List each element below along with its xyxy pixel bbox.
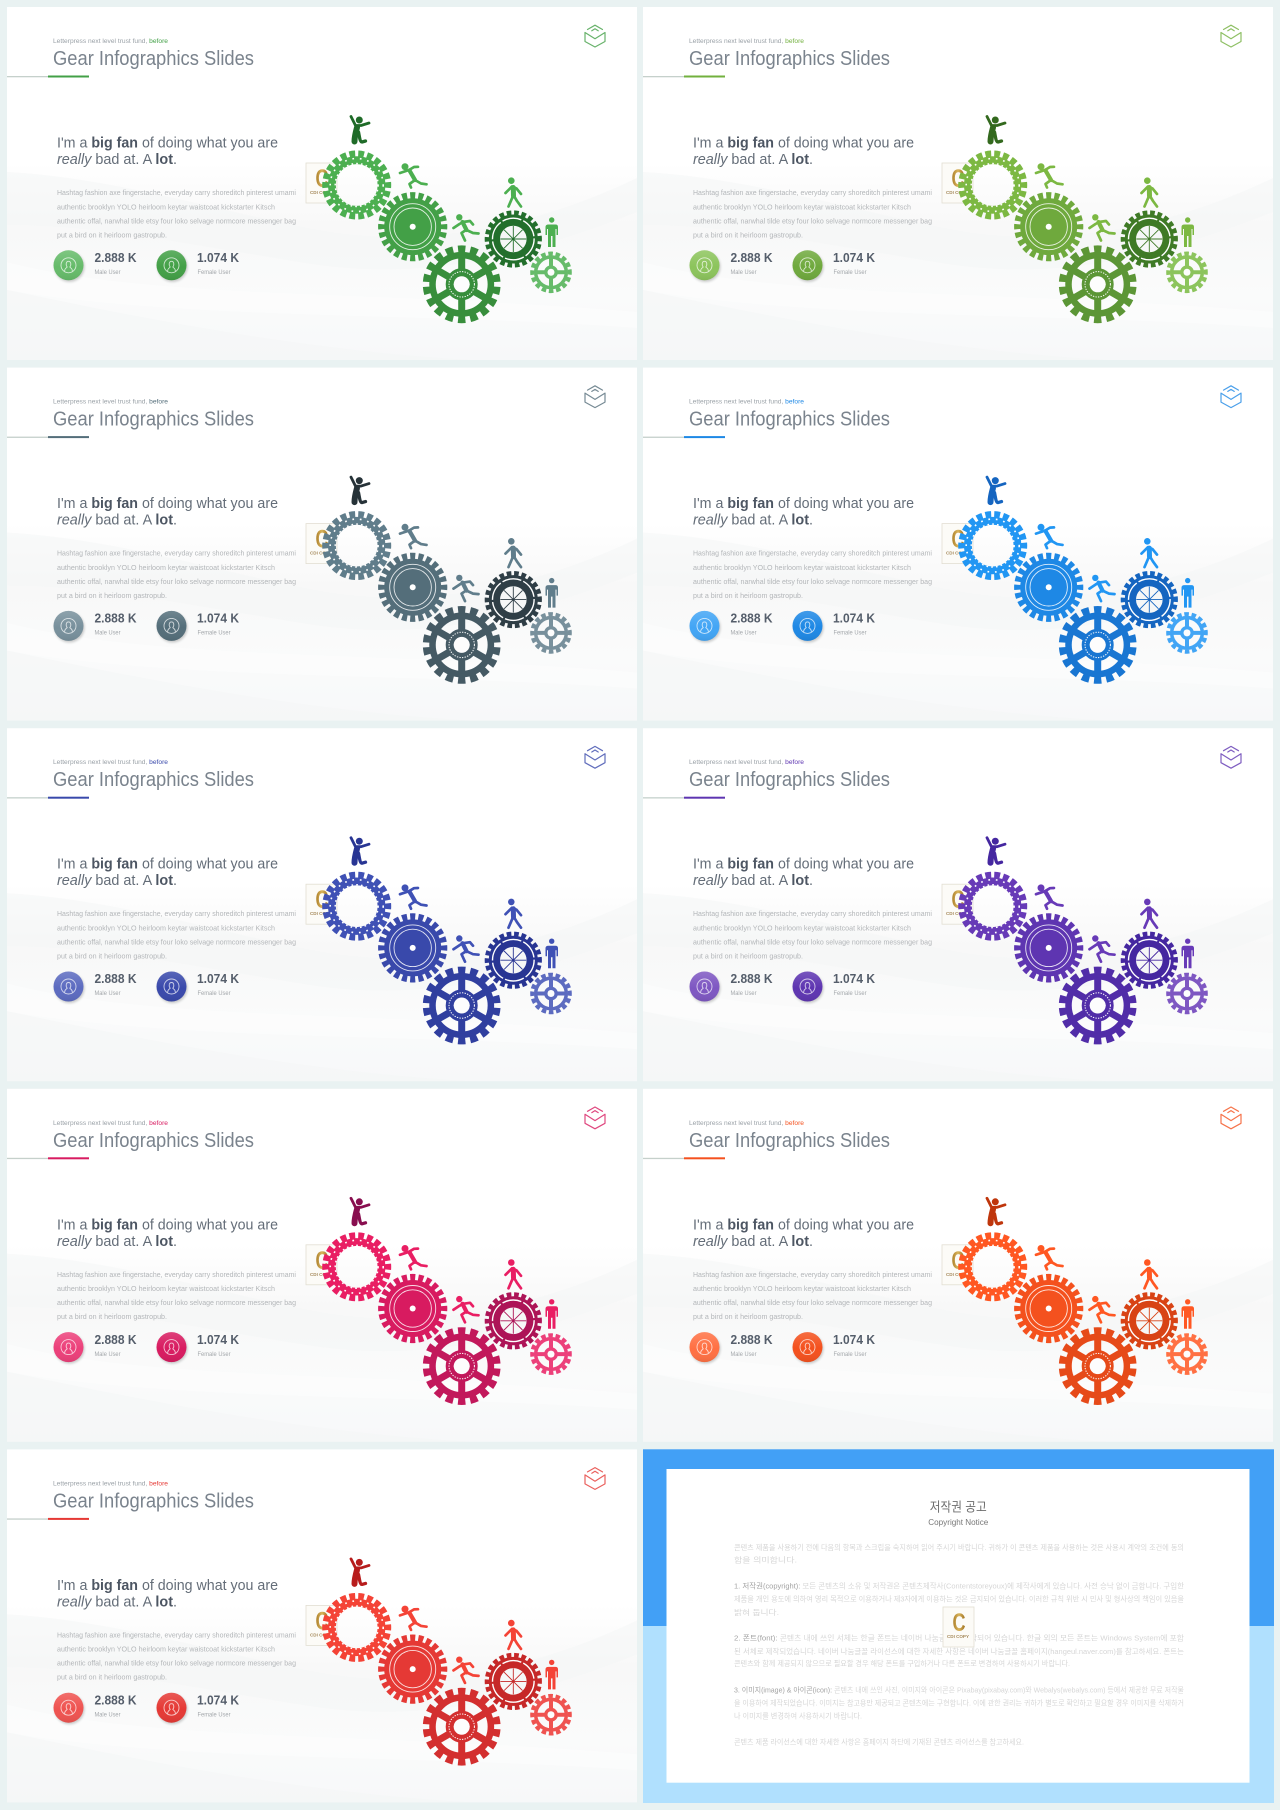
slide heading: Gear Infographics Slides bbox=[53, 1490, 254, 1512]
icon: cube bbox=[1221, 386, 1241, 408]
slide background bbox=[643, 368, 1273, 721]
notice intro bbox=[734, 1542, 1184, 1565]
body paragraph: put a bird on it heirloom gastropub. bbox=[693, 593, 803, 600]
body paragraph: authentic brooklyn YOLO heirloom keytar waistcoat kickstarter Kitsch bbox=[57, 204, 275, 211]
stat: male user: 2.888 K bbox=[730, 611, 773, 626]
headline second line: really bad at. A lot. bbox=[57, 151, 177, 168]
notice section 1: 1. 저작권(copyright): 모든 콘텐츠의 소유 및 저작권은 콘텐츠제작사(Contentstoreyoux)에 제작사에게 있습니다. 사전 승낙 없이 금합니다. 구입한 bbox=[734, 1581, 1184, 1591]
headline second line: really bad at. A lot. bbox=[57, 1593, 177, 1610]
heading underline bbox=[7, 1518, 89, 1520]
watermark logo bbox=[942, 884, 973, 924]
body paragraph: authentic brooklyn YOLO heirloom keytar waistcoat kickstarter Kitsch bbox=[693, 1286, 911, 1293]
stat: male user: Male User bbox=[730, 991, 756, 997]
stat: female user: 1.074 K bbox=[197, 1332, 240, 1347]
notice section 2: 2. 폰트(font): 콘텐츠 내에 쓰인 서체는 한글 폰트는 네이버 나눔글꼴이 제작되어 있습니다. 한글 외의 모든 폰트는 Windows System에 포함 bbox=[734, 1633, 1184, 1643]
headline second line: really bad at. A lot. bbox=[57, 1233, 177, 1250]
stat: female user bbox=[792, 1332, 876, 1364]
gear illustration with people bbox=[326, 1198, 570, 1401]
body paragraph: Hashtag fashion axe fingerstache, everyday carry shoreditch pinterest umami bbox=[693, 1272, 932, 1279]
headline second line: really bad at. A lot. bbox=[693, 872, 813, 889]
headline: I'm a big fan of doing what you are bbox=[693, 495, 914, 512]
watermark logo bbox=[942, 524, 973, 564]
heading underline bbox=[643, 797, 725, 799]
slide 7: pink bbox=[7, 1089, 637, 1442]
body paragraph: authentic brooklyn YOLO heirloom keytar waistcoat kickstarter Kitsch bbox=[693, 204, 911, 211]
body paragraph: authentic brooklyn YOLO heirloom keytar waistcoat kickstarter Kitsch bbox=[57, 926, 275, 933]
body paragraph bbox=[57, 190, 296, 239]
icon: cube bbox=[1221, 1107, 1241, 1129]
headline: I'm a big fan of doing what you are bbox=[693, 856, 914, 873]
body paragraph: put a bird on it heirloom gastropub. bbox=[693, 1314, 803, 1321]
slide background bbox=[7, 728, 637, 1081]
watermark logo bbox=[306, 163, 337, 203]
headline: I'm a big fan of doing what you are bbox=[57, 856, 278, 873]
watermark logo bbox=[942, 1245, 973, 1285]
heading underline bbox=[7, 76, 89, 78]
headline second line: really bad at. A lot. bbox=[693, 512, 813, 529]
stat: male user: 2.888 K bbox=[94, 971, 137, 986]
heading underline bbox=[7, 797, 89, 799]
header subtitle: Letterpress next level trust fund, before bbox=[53, 1120, 168, 1127]
heading underline bbox=[7, 1157, 89, 1159]
header subtitle: Letterpress next level trust fund, before bbox=[689, 1120, 804, 1127]
stat: male user: Male User bbox=[94, 991, 120, 997]
body paragraph: authentic brooklyn YOLO heirloom keytar waistcoat kickstarter Kitsch bbox=[57, 1647, 275, 1654]
body paragraph: put a bird on it heirloom gastropub. bbox=[57, 954, 167, 961]
white notice panel bbox=[666, 1469, 1250, 1783]
heading underline bbox=[643, 76, 725, 78]
body paragraph: authentic brooklyn YOLO heirloom keytar waistcoat kickstarter Kitsch bbox=[57, 1286, 275, 1293]
watermark logo bbox=[943, 1607, 974, 1647]
slide heading: Gear Infographics Slides bbox=[53, 1130, 254, 1152]
slide heading: Gear Infographics Slides bbox=[53, 48, 254, 70]
slide heading: Gear Infographics Slides bbox=[53, 409, 254, 431]
body paragraph: authentic offal, narwhal tilde etsy four loko selvage normcore messenger bag bbox=[57, 1661, 296, 1668]
headline second line: really bad at. A lot. bbox=[57, 512, 177, 529]
slide 2: lime bbox=[643, 7, 1273, 360]
notice section 1: 밝혀 둡니다. bbox=[734, 1607, 779, 1617]
notice intro: 함을 의미합니다. bbox=[734, 1555, 797, 1565]
header subtitle: Letterpress next level trust fund, before bbox=[53, 38, 168, 45]
watermark logo bbox=[306, 1245, 337, 1285]
stat: male user bbox=[690, 611, 773, 642]
notice subtitle: Copyright Notice bbox=[928, 1518, 989, 1527]
stat: male user bbox=[690, 971, 773, 1003]
icon: cube bbox=[585, 746, 605, 768]
slide heading: Gear Infographics Slides bbox=[689, 1130, 890, 1152]
body paragraph: Hashtag fashion axe fingerstache, everyday carry shoreditch pinterest umami bbox=[57, 551, 296, 558]
stat: female user: Female User bbox=[198, 991, 230, 997]
stat: male user: 2.888 K bbox=[94, 611, 137, 626]
stat: male user: Male User bbox=[94, 1712, 120, 1718]
stat: female user bbox=[156, 971, 240, 1003]
stat: female user bbox=[156, 1332, 240, 1364]
icon: cube bbox=[585, 1468, 605, 1489]
body paragraph: authentic offal, narwhal tilde etsy four loko selvage normcore messenger bag bbox=[693, 1300, 932, 1307]
watermark logo bbox=[306, 1605, 337, 1645]
notice section 3: 나 이미지를 변경하여 사용하시기 바랍니다. bbox=[734, 1710, 862, 1720]
headline second line: really bad at. A lot. bbox=[693, 151, 813, 168]
slide heading: Gear Infographics Slides bbox=[53, 769, 254, 791]
stat: female user: Female User bbox=[834, 1352, 866, 1358]
body paragraph: put a bird on it heirloom gastropub. bbox=[57, 232, 167, 239]
body paragraph: authentic brooklyn YOLO heirloom keytar waistcoat kickstarter Kitsch bbox=[693, 926, 911, 933]
headline second line: really bad at. A lot. bbox=[693, 1233, 813, 1250]
stat: male user: Male User bbox=[730, 631, 756, 637]
slide background bbox=[643, 728, 1273, 1081]
notice section 1: 제품을 개인 용도에 의하여 영리 목적으로 이용하거나 제3자에게 이용하는 것은 금지되어 있습니다. 이러한 규칙 위반 시 민사 및 형사상의 책임이 있음을 bbox=[734, 1593, 1184, 1603]
headline: I'm a big fan of doing what you are bbox=[693, 134, 914, 152]
stat: male user bbox=[54, 1332, 137, 1364]
gear illustration with people bbox=[962, 477, 1206, 680]
body paragraph: authentic offal, narwhal tilde etsy four loko selvage normcore messenger bag bbox=[693, 940, 932, 947]
header subtitle: Letterpress next level trust fund, before bbox=[53, 1480, 168, 1487]
heading underline bbox=[7, 436, 89, 438]
slide 8: orange bbox=[643, 1089, 1273, 1442]
body paragraph bbox=[57, 1632, 296, 1682]
stat: female user: 1.074 K bbox=[833, 1332, 876, 1347]
stat: male user: 2.888 K bbox=[94, 250, 137, 265]
stat: female user bbox=[792, 971, 876, 1003]
stat: female user: Female User bbox=[198, 270, 230, 276]
headline: I'm a big fan of doing what you are bbox=[693, 1216, 914, 1233]
gear illustration with people bbox=[962, 838, 1206, 1041]
body paragraph: authentic offal, narwhal tilde etsy four loko selvage normcore messenger bag bbox=[57, 579, 296, 586]
body paragraph: authentic brooklyn YOLO heirloom keytar waistcoat kickstarter Kitsch bbox=[693, 565, 911, 572]
body paragraph bbox=[693, 1272, 932, 1321]
stat: male user bbox=[54, 971, 137, 1003]
slide background bbox=[643, 1089, 1273, 1442]
stat: female user: 1.074 K bbox=[833, 611, 876, 626]
two-tone blue frame bbox=[643, 1449, 1274, 1803]
body paragraph: put a bird on it heirloom gastropub. bbox=[693, 232, 803, 239]
slide 3: slate bbox=[7, 368, 637, 721]
stat: female user: Female User bbox=[198, 1352, 230, 1358]
heading underline bbox=[643, 436, 725, 438]
icon: cube bbox=[585, 25, 605, 47]
gear illustration with people bbox=[326, 116, 570, 319]
notice section 3 bbox=[734, 1684, 1184, 1720]
body paragraph: authentic offal, narwhal tilde etsy four loko selvage normcore messenger bag bbox=[57, 218, 296, 225]
body paragraph: Hashtag fashion axe fingerstache, everyday carry shoreditch pinterest umami bbox=[693, 190, 932, 197]
stat: female user bbox=[792, 250, 876, 282]
icon: cube bbox=[1221, 746, 1241, 768]
notice title: 저작권 공고 bbox=[930, 1500, 987, 1515]
slide 5: indigo bbox=[7, 728, 637, 1081]
icon: cube bbox=[585, 1107, 605, 1129]
headline: I'm a big fan of doing what you are bbox=[57, 1577, 278, 1594]
stat: male user: Male User bbox=[730, 270, 756, 276]
stat: male user bbox=[690, 250, 773, 282]
heading underline bbox=[643, 1157, 725, 1159]
body paragraph: authentic offal, narwhal tilde etsy four loko selvage normcore messenger bag bbox=[693, 579, 932, 586]
watermark logo bbox=[306, 524, 337, 564]
watermark logo bbox=[942, 163, 973, 203]
body paragraph: authentic offal, narwhal tilde etsy four loko selvage normcore messenger bag bbox=[57, 940, 296, 947]
stat: female user bbox=[156, 1692, 240, 1724]
watermark logo bbox=[306, 884, 337, 924]
body paragraph bbox=[57, 911, 296, 960]
stat: female user: Female User bbox=[198, 1712, 230, 1718]
gear illustration with people bbox=[962, 116, 1206, 319]
stat: male user: Male User bbox=[94, 270, 120, 276]
stat: female user: 1.074 K bbox=[833, 250, 876, 265]
stat: female user bbox=[792, 611, 876, 642]
stat: male user: 2.888 K bbox=[730, 971, 773, 986]
stat: male user bbox=[54, 1692, 137, 1724]
slide 6: purple bbox=[643, 728, 1273, 1081]
icon: cube bbox=[585, 386, 605, 408]
stat: male user: 2.888 K bbox=[94, 1692, 137, 1707]
header subtitle: Letterpress next level trust fund, before bbox=[689, 38, 804, 45]
notice intro: 콘텐츠 제품을 사용하기 전에 다음의 항목과 스크립을 숙지하여 읽어 주시기 바랍니다. 귀하가 이 콘텐츠 제품을 사용하는 것은 사용시 계약의 조건에 동의 bbox=[734, 1542, 1184, 1552]
gear illustration with people bbox=[326, 838, 570, 1041]
body paragraph: put a bird on it heirloom gastropub. bbox=[693, 954, 803, 961]
gear illustration with people bbox=[326, 477, 570, 680]
gear illustration with people bbox=[962, 1198, 1206, 1401]
body paragraph bbox=[57, 551, 296, 600]
slide background bbox=[7, 7, 637, 360]
stat: male user bbox=[54, 250, 137, 282]
header subtitle: Letterpress next level trust fund, before bbox=[53, 399, 168, 406]
body paragraph bbox=[57, 1272, 296, 1321]
stat: male user: Male User bbox=[94, 631, 120, 637]
body paragraph: put a bird on it heirloom gastropub. bbox=[57, 1314, 167, 1321]
stat: male user: Male User bbox=[730, 1352, 756, 1358]
headline second line: really bad at. A lot. bbox=[57, 872, 177, 889]
stat: male user: 2.888 K bbox=[94, 1332, 137, 1347]
slide background bbox=[643, 7, 1273, 360]
notice section 2: 된 서체로 제작되었습니다. 네이버 나눔글꼴 라이선스에 대한 자세한 사항은 네이버 나눔글꼴 홈페이지(hangeul.naver.com)를 참고하세요. 폰트는 bbox=[734, 1646, 1184, 1656]
stat: female user: 1.074 K bbox=[197, 250, 240, 265]
icon: cube bbox=[1221, 25, 1241, 47]
body paragraph bbox=[693, 911, 932, 960]
body paragraph: put a bird on it heirloom gastropub. bbox=[57, 593, 167, 600]
notice section 3: 을 이용하여 제작되었습니다. 이미지는 참고용만 제공되고 콘텐츠에는 구현합니다. 이에 관한 권리는 귀하가 별도로 확인하고 필요할 경우 이미지를 삭제하거 bbox=[734, 1698, 1184, 1708]
stat: female user: 1.074 K bbox=[833, 971, 876, 986]
slide heading: Gear Infographics Slides bbox=[689, 409, 890, 431]
slide heading: Gear Infographics Slides bbox=[689, 48, 890, 70]
stat: female user: 1.074 K bbox=[197, 1692, 240, 1707]
notice footer: 콘텐츠 제품 라이선스에 대한 자세한 사항은 홈페이지 하단에 기재된 콘텐츠 라이선스를 참고하세요. bbox=[734, 1736, 1024, 1746]
slide 9: red bbox=[7, 1449, 637, 1802]
stat: female user: Female User bbox=[834, 631, 866, 637]
slide heading: Gear Infographics Slides bbox=[689, 769, 890, 791]
body paragraph: Hashtag fashion axe fingerstache, everyday carry shoreditch pinterest umami bbox=[57, 190, 296, 197]
header subtitle: Letterpress next level trust fund, before bbox=[689, 759, 804, 766]
body paragraph: Hashtag fashion axe fingerstache, everyday carry shoreditch pinterest umami bbox=[693, 911, 932, 918]
gear illustration with people bbox=[326, 1559, 570, 1762]
slide background bbox=[7, 1089, 637, 1442]
stat: female user: Female User bbox=[198, 631, 230, 637]
body paragraph: authentic offal, narwhal tilde etsy four loko selvage normcore messenger bag bbox=[693, 218, 932, 225]
header subtitle: Letterpress next level trust fund, before bbox=[689, 399, 804, 406]
headline: I'm a big fan of doing what you are bbox=[57, 1216, 278, 1233]
stat: male user bbox=[690, 1332, 773, 1364]
body paragraph: Hashtag fashion axe fingerstache, everyday carry shoreditch pinterest umami bbox=[57, 911, 296, 918]
body paragraph: Hashtag fashion axe fingerstache, everyday carry shoreditch pinterest umami bbox=[693, 551, 932, 558]
stat: female user: 1.074 K bbox=[197, 971, 240, 986]
body paragraph: authentic offal, narwhal tilde etsy four loko selvage normcore messenger bag bbox=[57, 1300, 296, 1307]
body paragraph: Hashtag fashion axe fingerstache, everyday carry shoreditch pinterest umami bbox=[57, 1272, 296, 1279]
stat: female user bbox=[156, 611, 240, 642]
slide background bbox=[7, 1449, 637, 1802]
stat: male user: 2.888 K bbox=[730, 1332, 773, 1347]
slide 4: blue bbox=[643, 368, 1273, 721]
header subtitle: Letterpress next level trust fund, before bbox=[53, 759, 168, 766]
headline: I'm a big fan of doing what you are bbox=[57, 134, 278, 152]
notice section 2 bbox=[734, 1633, 1184, 1668]
body paragraph bbox=[693, 190, 932, 239]
stat: male user: 2.888 K bbox=[730, 250, 773, 265]
notice section 3: 3. 이미지(image) & 아이콘(icon): 콘텐츠 내에 쓰인 사진, 이미지와 아이콘은 Pixabay(pixabay.com)와 Webalys(webalys.com) 등에서 제공한 무료 저작물 bbox=[734, 1684, 1184, 1694]
stat: female user: Female User bbox=[834, 991, 866, 997]
body paragraph bbox=[693, 551, 932, 600]
body paragraph: authentic brooklyn YOLO heirloom keytar waistcoat kickstarter Kitsch bbox=[57, 565, 275, 572]
slide background bbox=[7, 368, 637, 721]
stat: female user: Female User bbox=[834, 270, 866, 276]
slide 10: copyright notice bbox=[643, 1449, 1274, 1803]
slide 1: green bbox=[7, 7, 637, 360]
notice section 1 bbox=[734, 1581, 1184, 1617]
stat: female user: 1.074 K bbox=[197, 611, 240, 626]
stat: male user bbox=[54, 611, 137, 642]
stat: female user bbox=[156, 250, 240, 282]
body paragraph: Hashtag fashion axe fingerstache, everyday carry shoreditch pinterest umami bbox=[57, 1632, 296, 1639]
stat: male user: Male User bbox=[94, 1352, 120, 1358]
headline: I'm a big fan of doing what you are bbox=[57, 495, 278, 512]
body paragraph: put a bird on it heirloom gastropub. bbox=[57, 1675, 167, 1682]
notice section 2: 콘텐츠와 함께 제공되지 않으므로 필요할 경우 해당 폰트를 구입하거나 다른 폰트로 변경하여 사용하시기 바랍니다. bbox=[734, 1658, 1070, 1668]
